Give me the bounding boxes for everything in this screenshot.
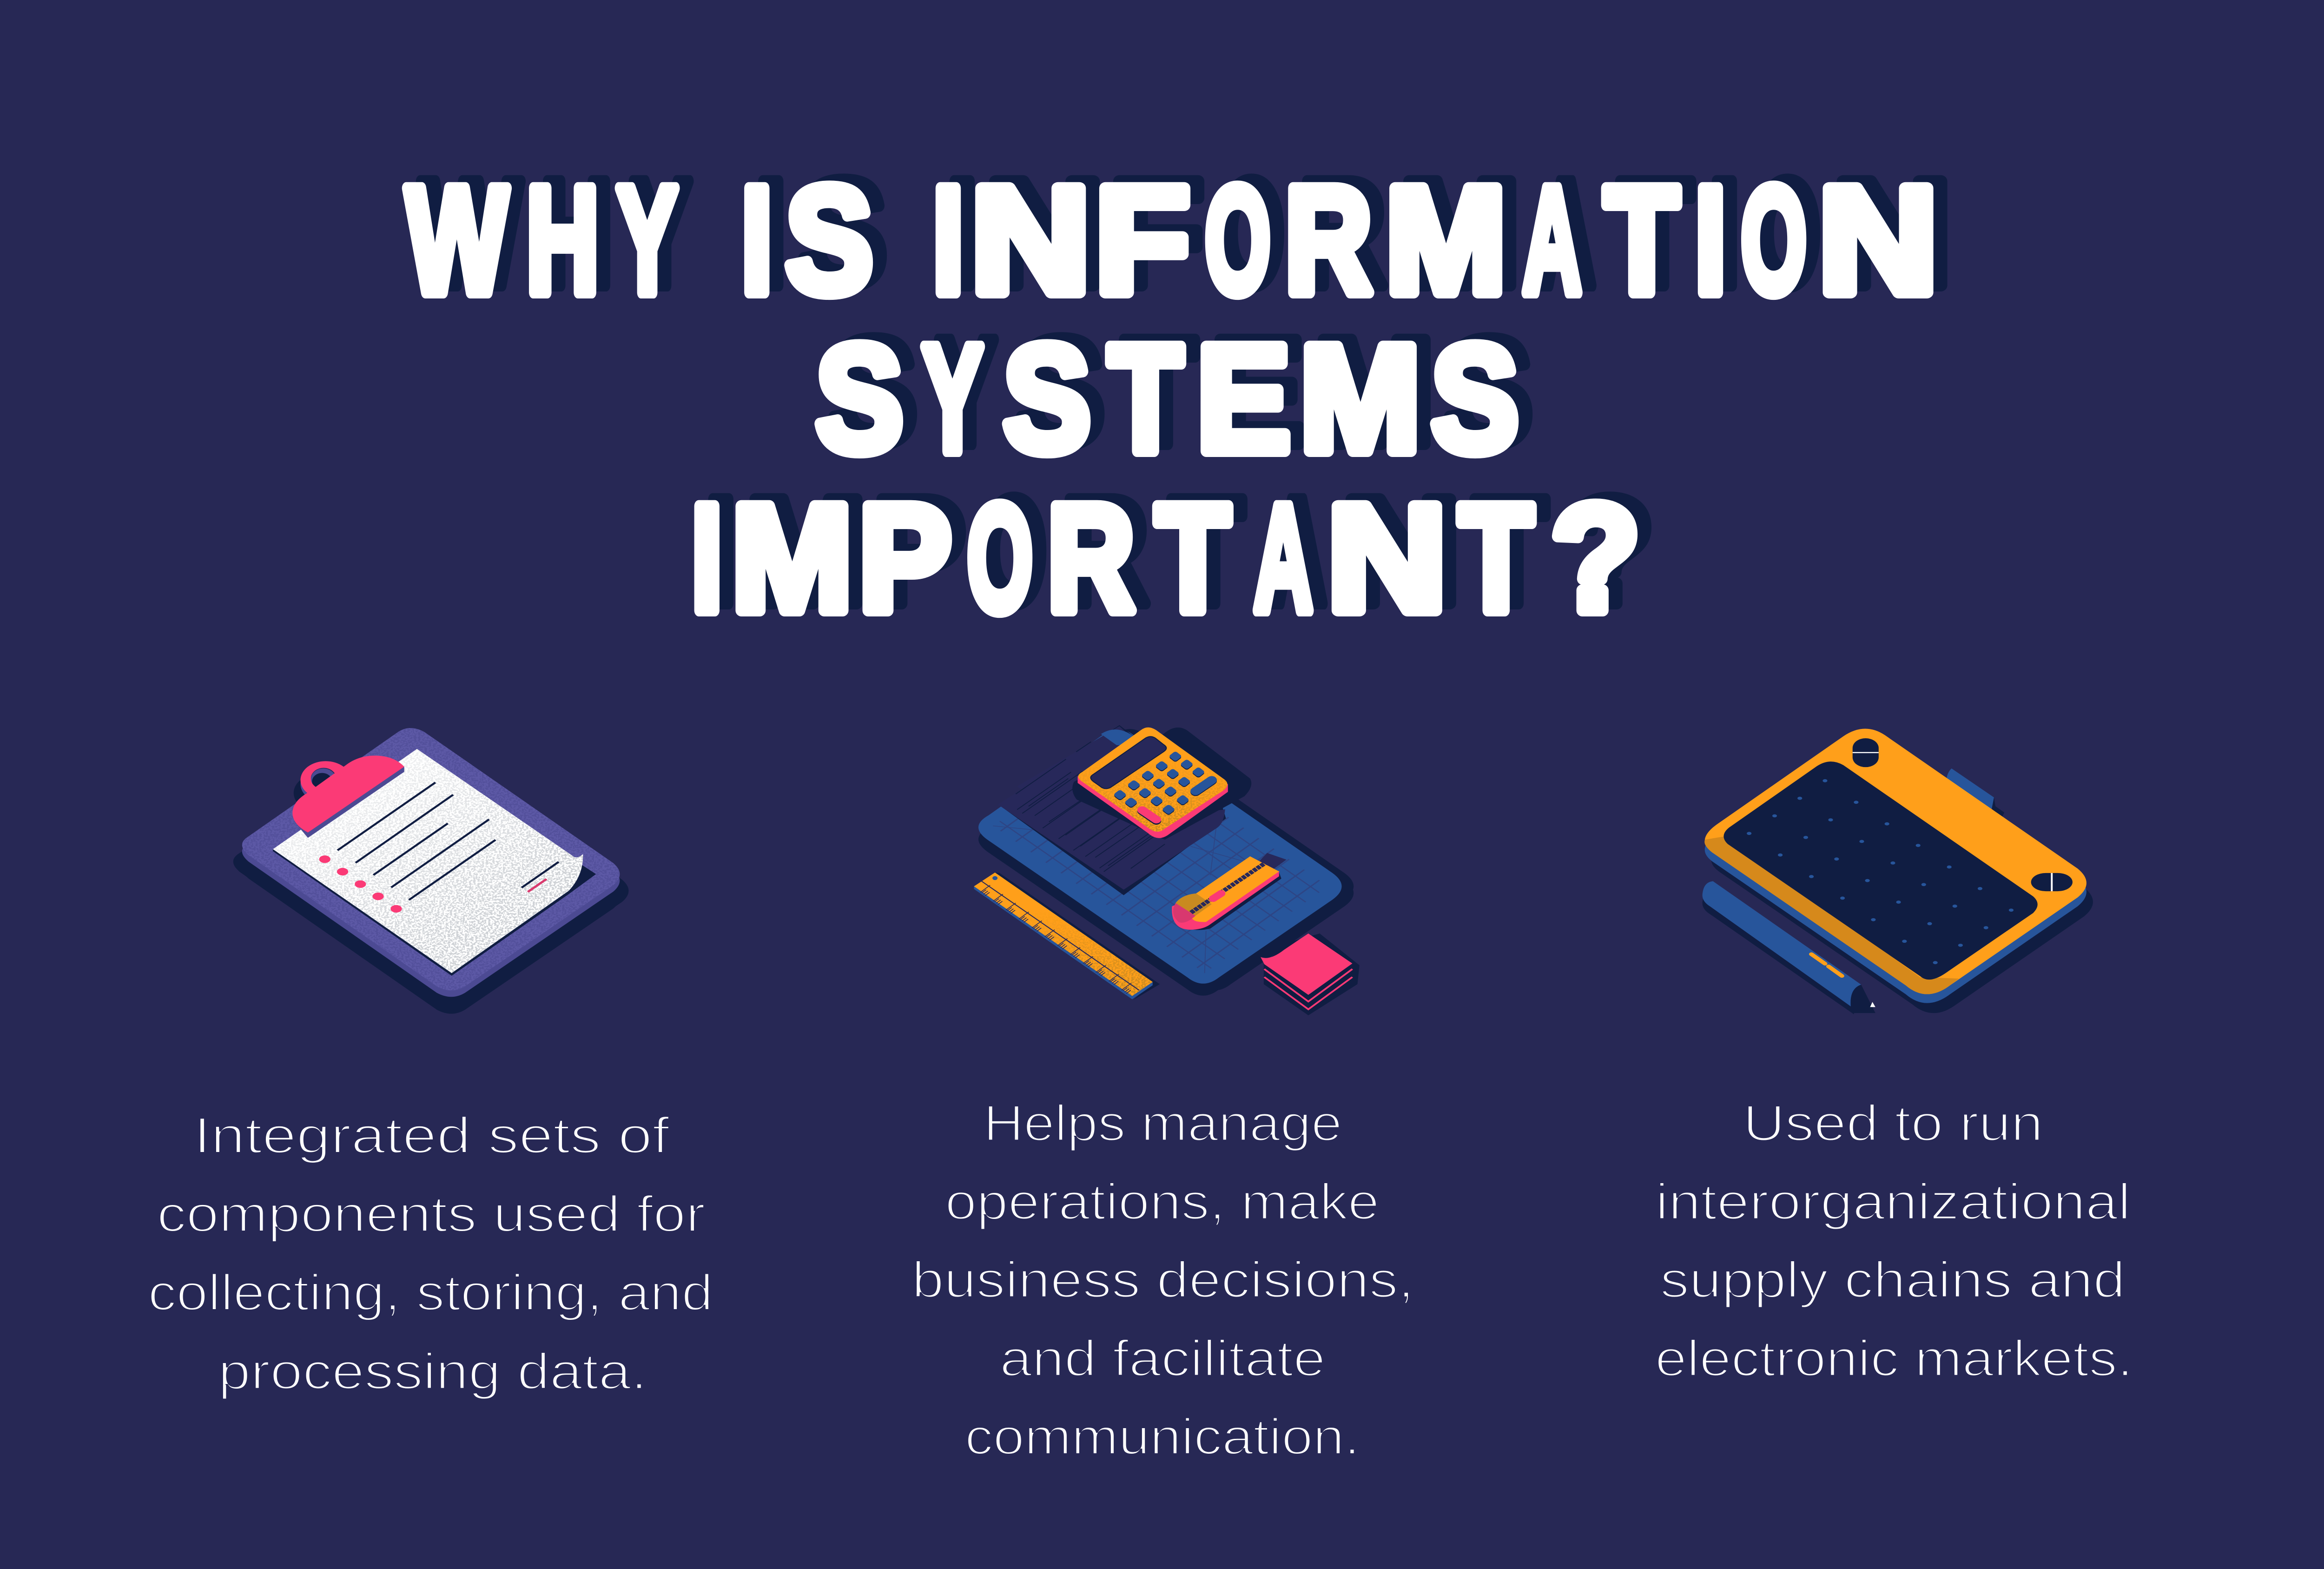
ruler shadow bbox=[995, 873, 1160, 1000]
title: F bbox=[1095, 155, 1190, 325]
calculator body bbox=[1078, 728, 1228, 832]
text block: column one: collecting, storing, and bbox=[148, 1264, 713, 1321]
title: I bbox=[691, 473, 723, 643]
title: M bbox=[1386, 155, 1506, 325]
title: I bbox=[741, 155, 772, 325]
clip ring shadow bbox=[294, 774, 344, 812]
top pill button bbox=[1853, 738, 1879, 767]
text block: column two: and facilitate bbox=[1000, 1330, 1326, 1387]
tablet back tab bbox=[1947, 768, 2004, 817]
title: O bbox=[1205, 155, 1270, 325]
title: A bbox=[1254, 473, 1313, 643]
title: P bbox=[859, 473, 951, 643]
clip ring bbox=[300, 761, 351, 803]
text block: column one: components used for bbox=[157, 1185, 706, 1243]
title: Y bbox=[922, 313, 983, 483]
tablet body bbox=[1705, 729, 2086, 994]
title: I bbox=[1695, 155, 1726, 325]
title bbox=[406, 155, 1938, 643]
title: N bbox=[1327, 473, 1447, 643]
text block: column two bbox=[912, 1095, 1414, 1465]
knife grip shade bbox=[1175, 894, 1212, 916]
text block: column two: operations, make bbox=[945, 1173, 1380, 1230]
calculator shadow bbox=[1072, 728, 1251, 840]
title: I bbox=[932, 155, 964, 325]
tablet screen bbox=[1723, 761, 2038, 980]
title: E bbox=[1197, 313, 1290, 483]
mat diagonals bbox=[993, 826, 1261, 973]
right pill button bbox=[2031, 873, 2073, 891]
title: O bbox=[1741, 155, 1807, 325]
text block: column three: supply chains and bbox=[1660, 1251, 2125, 1309]
knife shadow bbox=[1176, 871, 1281, 930]
title: N bbox=[1818, 155, 1938, 325]
wide key bbox=[1195, 780, 1212, 792]
title: M bbox=[1300, 313, 1421, 483]
paper speckle bbox=[273, 749, 583, 973]
screen dots bbox=[1747, 779, 2014, 964]
knife blade bbox=[1259, 853, 1287, 870]
ruler bbox=[974, 873, 1153, 996]
text block: column one: Integrated sets of bbox=[194, 1107, 670, 1164]
text block: column two: communication. bbox=[965, 1408, 1360, 1465]
calculator side bbox=[1078, 776, 1228, 838]
stylus body bbox=[1703, 881, 1861, 1006]
title: A bbox=[1523, 155, 1582, 325]
mat shadow bbox=[978, 729, 1353, 996]
stylus buttons bbox=[1811, 954, 1842, 976]
text block: column three: electronic markets. bbox=[1655, 1330, 2133, 1387]
calculator speckle bbox=[1078, 728, 1228, 832]
title: Y bbox=[617, 155, 678, 325]
ruler markings bbox=[980, 876, 1139, 993]
stylus tip bbox=[1870, 1002, 1875, 1007]
ruler speckle bbox=[974, 873, 1153, 996]
pink key bbox=[1142, 810, 1156, 821]
clipboard board bbox=[242, 728, 620, 990]
clipboard side bbox=[242, 735, 620, 997]
icon: drawing tablet and stylus bbox=[1703, 729, 2093, 1014]
title: T bbox=[1459, 473, 1533, 643]
paper shadow bbox=[999, 725, 1226, 895]
board shading bbox=[242, 728, 620, 990]
title: R bbox=[1047, 473, 1135, 643]
note pad body bbox=[1264, 933, 1360, 1015]
knife slider bbox=[1213, 894, 1221, 899]
text block: column one: processing data. bbox=[218, 1343, 647, 1400]
ruler side bbox=[974, 887, 1153, 1000]
mat clip tip bbox=[1101, 729, 1134, 745]
tablet shadow bbox=[1711, 748, 2093, 1013]
knife side bbox=[1172, 871, 1279, 930]
mat grid bbox=[993, 740, 1328, 973]
title: T bbox=[1155, 473, 1230, 643]
title: H bbox=[526, 155, 599, 325]
title: S bbox=[1432, 313, 1519, 483]
title: M bbox=[732, 473, 852, 643]
text block: column two: Helps manage bbox=[984, 1095, 1342, 1152]
text block: column two: business decisions, bbox=[912, 1251, 1414, 1309]
stylus shadow bbox=[1703, 889, 1861, 1014]
text block: column one bbox=[148, 1107, 713, 1400]
icon: calculator, cutting mat, ruler, knife and notes bbox=[974, 725, 1360, 1015]
stylus nib bbox=[1851, 985, 1875, 1013]
text block: column three: interorganizational bbox=[1656, 1173, 2131, 1230]
text block: column three bbox=[1655, 1095, 2133, 1387]
tablet lower shade bbox=[1704, 836, 1959, 994]
title: S bbox=[1004, 313, 1090, 483]
knife body bbox=[1175, 856, 1279, 922]
title: O bbox=[967, 473, 1033, 643]
title: ? bbox=[1551, 473, 1640, 643]
knife slot bbox=[1191, 861, 1268, 913]
text block: column three: Used to run bbox=[1743, 1095, 2043, 1152]
icon: clipboard bbox=[233, 728, 628, 1014]
title: T bbox=[1604, 155, 1679, 325]
paper top bbox=[1017, 726, 1136, 822]
calculator keys bbox=[1113, 751, 1205, 815]
note pad stripes bbox=[1264, 969, 1353, 1009]
title: W bbox=[406, 155, 508, 325]
title: N bbox=[971, 155, 1090, 325]
clip body bbox=[292, 755, 404, 833]
title: S bbox=[816, 313, 903, 483]
paper lines bbox=[1016, 742, 1202, 872]
text lines bbox=[337, 782, 559, 900]
note pad top bbox=[1261, 933, 1353, 995]
title: R bbox=[1285, 155, 1372, 325]
cutting mat bbox=[978, 729, 1342, 984]
title: T bbox=[1109, 313, 1183, 483]
clipboard shadow bbox=[233, 745, 628, 1014]
calculator screen bbox=[1091, 736, 1166, 789]
title: S bbox=[786, 155, 873, 325]
knife handle shade bbox=[1173, 903, 1195, 923]
clip depth bbox=[295, 766, 404, 838]
bullet dots bbox=[319, 855, 402, 913]
pink signature bbox=[528, 879, 547, 892]
tablet side bbox=[1705, 738, 2086, 1003]
paper bbox=[997, 728, 1225, 890]
paper shadow bbox=[273, 849, 596, 976]
paper bbox=[273, 749, 583, 973]
